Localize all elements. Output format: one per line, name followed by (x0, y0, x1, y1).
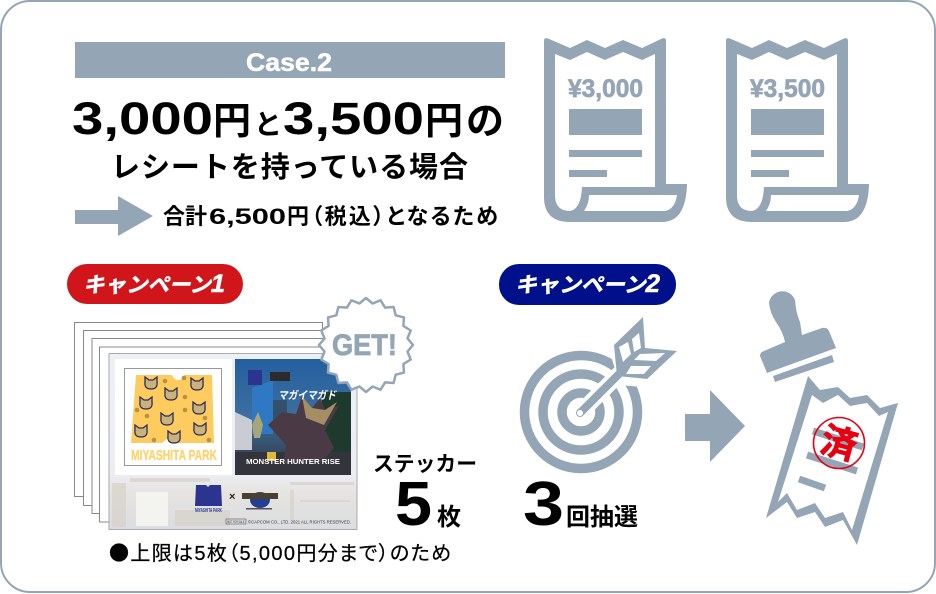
text: sticker count: ステッカー (373, 453, 477, 476)
text: sticker count: 5 (395, 470, 432, 539)
stamp mark: 済: 済 (816, 419, 862, 468)
logo: Miyashita Park (195, 485, 222, 514)
arrow: total (75, 196, 153, 236)
sticker photo: monster: MONSTER HUNTER RISE (246, 457, 340, 466)
logo: Monster Hunter Rise (242, 492, 278, 510)
text: three draws: 回抽選 (566, 504, 638, 531)
text: three draws: 3 (523, 470, 564, 539)
heading bar: Case.2: Case.2 (246, 49, 332, 77)
icon: stamp (760, 291, 836, 382)
text: sticker count (373, 453, 477, 539)
title: amounts: 円 (213, 101, 251, 143)
note: upper limit: ●上限は5枚（5,000円分まで）のため (109, 537, 451, 566)
cross mark: × (229, 491, 235, 503)
sticker photo: monster (235, 359, 351, 475)
icon: receipt 3000: ¥3,000 (568, 75, 643, 103)
label: campaign 2 (499, 264, 676, 305)
sticker artwork: Miyashita Park: MIYASHITA PARK (131, 447, 217, 464)
heading bar: Case.2 (75, 42, 505, 78)
total text (163, 204, 498, 229)
sticker card (109, 354, 357, 530)
label: campaign 1: キャンペーン1 (83, 270, 225, 298)
label: campaign 2: キャンペーン2 (515, 270, 660, 298)
icon: receipt 3500: ¥3,500 (750, 75, 825, 103)
subtitle: receipts: レシートを持っている場合 (111, 151, 468, 184)
legal line: NOT FOR SALE (228, 520, 245, 524)
total text: 円（税込）となるため (287, 204, 498, 229)
logo: Miyashita Park: MIYASHITA PARK (195, 508, 222, 514)
sticker artwork: Miyashita Park (115, 359, 232, 475)
title: amounts (72, 93, 504, 144)
legal line: ©CAPCOM CO., LTD. 2021 ALL RIGHTS RESERVED. (248, 520, 351, 524)
sticker photo: monster: マガイマガド (278, 389, 337, 402)
badge: GET! (319, 298, 413, 392)
title: amounts: 3,000 (72, 93, 213, 144)
badge: GET!: GET! (332, 329, 397, 362)
icon: receipt 3000 (544, 38, 687, 222)
sticker stack (74, 322, 357, 530)
title: amounts: 3,500 (283, 93, 424, 144)
title: amounts: の (466, 101, 504, 143)
icon: target and arrow (524, 312, 682, 468)
total text: 6,500 (209, 204, 286, 229)
title: amounts: と (254, 109, 282, 140)
arrow: to stamp (685, 390, 745, 462)
text: sticker count: 枚 (437, 504, 461, 531)
total text: 合計 (163, 204, 207, 229)
text: three draws (523, 470, 638, 539)
icon: used ticket (766, 376, 898, 545)
icon: receipt 3500 (726, 38, 869, 222)
label: campaign 1 (67, 264, 243, 304)
title: amounts: 円 (425, 101, 463, 143)
